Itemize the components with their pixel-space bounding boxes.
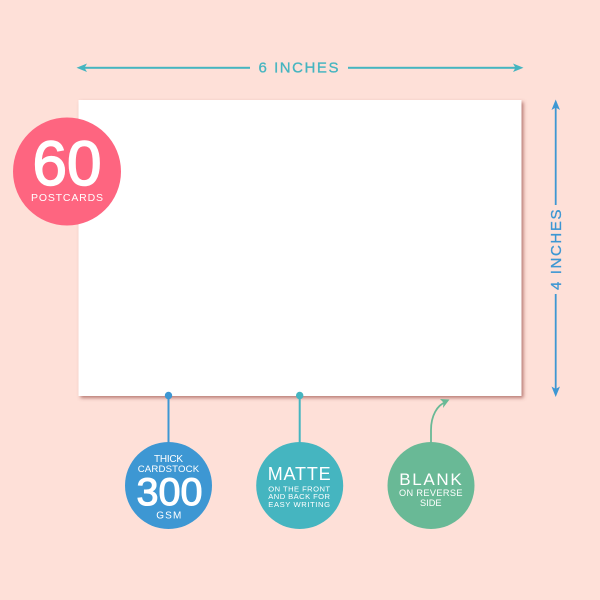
label: blank: BLANK	[399, 470, 462, 489]
label: thick cardstock	[138, 454, 200, 475]
panel: blank postcard	[78, 100, 522, 396]
arrow: 6 inches width dimension	[76, 60, 524, 76]
label: postcards: POSTCARDS	[31, 192, 103, 204]
badge: matte	[256, 442, 343, 529]
text: on reverse side: ON REVERSE	[399, 488, 462, 498]
label: thick cardstock: THICK	[154, 454, 183, 465]
connector: blue pin	[165, 392, 172, 444]
label: gsm: GSM	[156, 510, 181, 522]
label: matte: MATTE	[268, 464, 331, 484]
label: 6 inches: 6 INCHES	[258, 60, 338, 76]
label: thick cardstock: CARDSTOCK	[138, 464, 200, 475]
label: 4 inches: 4 INCHES	[548, 210, 565, 290]
arrow: 4 inches height dimension	[548, 100, 565, 397]
number: 300: 300	[136, 471, 202, 514]
number: 60: 60	[32, 129, 102, 199]
text: on the front and back for easy writing	[268, 484, 331, 509]
text: on the front and back for easy writing: AND BACK FOR	[268, 492, 331, 501]
text: on the front and back for easy writing: EASY WRITING	[268, 500, 330, 509]
text: on reverse side: SIDE	[420, 498, 442, 508]
connector: teal pin	[296, 392, 303, 444]
badge: blank on reverse side	[388, 442, 474, 529]
arrow: curved green arrow to reverse side	[431, 399, 450, 444]
text: on reverse side	[399, 488, 462, 508]
badge: thick cardstock 300 gsm	[125, 442, 212, 529]
badge: 60 postcards	[13, 118, 121, 226]
text: on the front and back for easy writing: ON THE FRONT	[268, 484, 330, 493]
